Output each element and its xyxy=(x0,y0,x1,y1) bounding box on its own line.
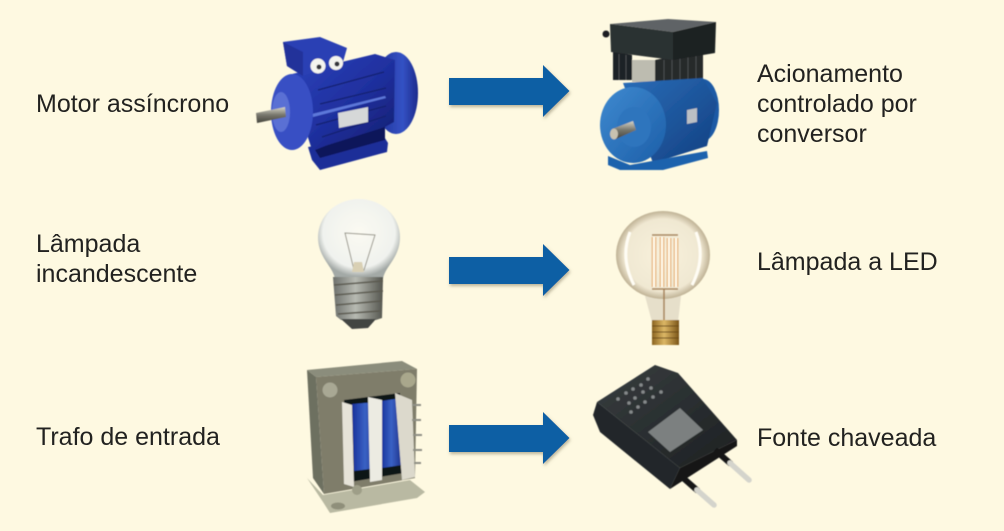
arrow: transformer xyxy=(449,412,570,464)
icon: LED filament bulb xyxy=(616,211,710,345)
label: Lâmpada incandescente: Lâmpada xyxy=(36,230,140,258)
label: Lâmpada incandescente: incandescente xyxy=(36,260,197,288)
label: Acionamento controlado por conversor: controlado por xyxy=(757,90,917,118)
label: Lâmpada incandescente xyxy=(36,230,197,288)
icon: input transformer xyxy=(307,361,425,513)
label: Lâmpada a LED: Lâmpada a LED xyxy=(757,248,938,276)
label: Motor assíncrono: Motor assíncrono xyxy=(36,90,229,118)
icon: converter-driven motor xyxy=(600,19,719,170)
arrow: lamp xyxy=(449,244,570,296)
label: Acionamento controlado por conversor xyxy=(757,60,917,148)
label: Trafo de entrada: Trafo de entrada xyxy=(36,423,220,451)
icon: switching power supply plug xyxy=(593,365,749,505)
label: Acionamento controlado por conversor: Acionamento xyxy=(757,60,903,88)
label: Fonte chaveada: Fonte chaveada xyxy=(757,424,936,452)
icon: blue induction motor xyxy=(256,37,418,170)
label: Acionamento controlado por conversor: conversor xyxy=(757,120,867,148)
icon: incandescent bulb xyxy=(318,199,400,329)
arrow: motor xyxy=(449,65,570,117)
